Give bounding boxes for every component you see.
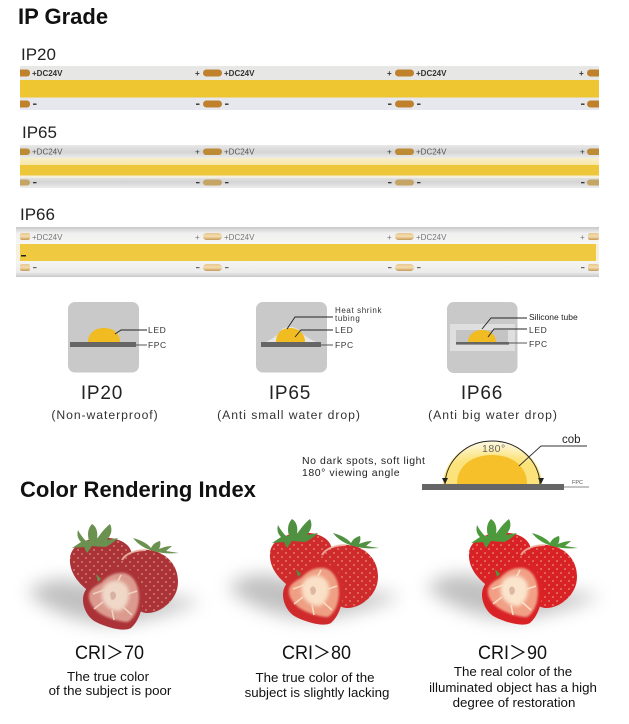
COB diagram: 180° [482, 443, 506, 455]
strawberries: CRI 80 [228, 519, 400, 625]
label: CRI 70: CRI＞70 [75, 643, 144, 664]
cross-section: IP66: LED [529, 325, 547, 335]
cross-section: IP20: FPC [148, 340, 167, 350]
caption: IP20: IP20 [81, 383, 123, 404]
note: viewing angle [302, 455, 425, 479]
COB diagram: cob [562, 434, 581, 446]
note: viewing angle: 180° viewing angle [302, 467, 400, 479]
description: CRI 90 [429, 664, 597, 710]
LED strip: IP66: +DC24V [32, 233, 63, 242]
LED strip: IP20: + [579, 69, 584, 78]
strawberries: CRI 90 [427, 519, 599, 625]
LED strip: IP66: + [580, 233, 585, 242]
description: CRI 80: The true color of the [256, 670, 374, 685]
COB diagram [422, 434, 589, 490]
LED strip: IP66: +DC24V [224, 233, 255, 242]
description: CRI 90: illuminated object has a high [429, 680, 597, 695]
strawberries: CRI 70 [28, 524, 200, 630]
cross-section: IP65: LED [335, 325, 353, 335]
heading: IP Grade: IP Grade [18, 4, 108, 29]
LED strip: IP20 [8, 60, 611, 115]
label: CRI 80: CRI＞80 [282, 643, 351, 664]
LED strip: IP65: +DC24V [224, 148, 255, 156]
label: IP65: IP65 [22, 123, 57, 142]
LED strip: IP66 [16, 227, 599, 277]
description: CRI 70: of the subject is poor [49, 683, 172, 698]
caption: IP65 [217, 383, 361, 422]
cross-section: IP65 [256, 302, 382, 372]
cross-section: IP65: tubing [335, 314, 360, 323]
LED strip: IP65: +DC24V [416, 148, 447, 156]
caption: IP20 [51, 383, 159, 422]
LED strip: IP65: + [580, 148, 585, 156]
LED strip: IP65: + [195, 148, 200, 156]
description: CRI 80: subject is slightly lacking [245, 685, 389, 700]
LED strip: IP20: +DC24V [224, 69, 255, 78]
LED strip: IP66: + [195, 233, 200, 242]
cross-section: IP66: Silicone tube [529, 312, 578, 322]
LED strip: IP20: +DC24V [416, 69, 447, 78]
label: CRI 90: CRI＞90 [478, 643, 547, 664]
description: CRI 80 [245, 670, 389, 700]
LED strip: IP66: + [387, 233, 392, 242]
cross-section: IP65: Heat shrink [335, 306, 382, 315]
caption: IP66 [428, 383, 558, 422]
LED strip: IP20: + [195, 69, 200, 78]
note: viewing angle: No dark spots, soft light [302, 455, 425, 467]
caption: IP65: IP65 [269, 383, 311, 404]
LED strip: IP20: + [387, 69, 392, 78]
caption: IP66: (Anti big water drop) [428, 408, 558, 422]
LED strip: IP66: +DC24V [416, 233, 447, 242]
cross-section: IP20 [68, 302, 167, 372]
cross-section: IP65: FPC [335, 340, 354, 350]
label: IP66: IP66 [20, 205, 55, 224]
cross-section: IP66 [447, 302, 578, 373]
caption: IP66: IP66 [461, 383, 503, 404]
cross-section: IP20: LED [148, 325, 166, 335]
heading: Color Rendering Index: Color Rendering Index [20, 477, 257, 502]
LED strip: IP65: + [387, 148, 392, 156]
LED strip: IP65 [8, 140, 611, 195]
description: CRI 90: The real color of the [454, 664, 572, 679]
COB diagram: FPC [572, 480, 583, 486]
cross-section: IP66: FPC [529, 339, 548, 349]
description: CRI 90: degree of restoration [453, 695, 575, 710]
description: CRI 70 [49, 669, 172, 698]
description: CRI 70: The true color [67, 669, 150, 684]
label: IP20: IP20 [21, 45, 56, 64]
caption: IP65: (Anti small water drop) [217, 408, 361, 422]
caption: IP20: (Non-waterproof) [51, 408, 159, 422]
LED strip: IP20: +DC24V [32, 69, 63, 78]
LED strip: IP65: +DC24V [32, 148, 63, 156]
